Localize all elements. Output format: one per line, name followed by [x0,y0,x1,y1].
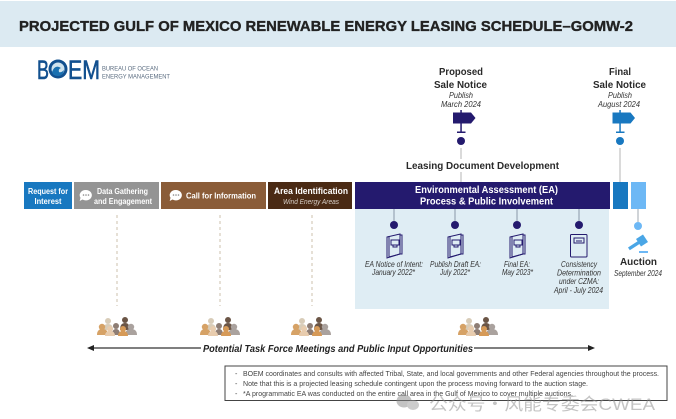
EA header bar: Process & Public Involvement [420,196,554,208]
dashed connectors [117,215,312,306]
EA step: consistency determination: April - July 2024 [553,286,603,295]
EA step: consistency determination: Determination [557,268,601,278]
phase: request for interest: Request for [28,187,68,196]
notes box: *A programmatic EA was conducted on the entire call area in the Gulf of Mexico to cover multiple auctions. [243,389,573,398]
milestone: proposed sale notice: Proposed [439,66,483,78]
milestone: final sale notice [593,66,646,133]
title band [0,1,676,47]
icon: consistency document [570,234,587,257]
notes box: Note that this is a projected leasing schedule contingent upon the process moving forward to the auction stage. [243,379,588,388]
EA step: final EA: May 2023* [502,268,534,277]
BOEM logo: ENERGY MANAGEMENT [102,74,170,80]
phase: call for information [161,182,266,209]
phase: data gathering: Data Gathering [97,187,148,196]
milestone: final sale notice: Final [609,66,631,78]
auction milestone: Auction [620,256,657,268]
phase: auction bar [631,182,646,209]
EA header bar [355,182,610,209]
milestone: final sale notice: Sale Notice [593,79,646,91]
title: PROJECTED GULF OF MEXICO RENEWABLE ENERGY LEASING SCHEDULE–GOMW-2 [19,18,633,35]
panel: environmental assessment [355,182,610,309]
phase: request for interest: Interest [34,197,62,206]
people group 1 [97,317,137,336]
EA header bar: Environmental Assessment (EA) [415,185,558,196]
EA step: consistency determination: under CZMA: [559,277,599,286]
EA step: publish draft: July 2022* [439,268,471,277]
milestone: final sale notice: Publish [608,91,632,100]
phase: area identification: Wind Energy Areas [283,197,339,206]
milestone: proposed sale notice: Sale Notice [434,79,487,91]
people group 2 [200,317,240,336]
icon: proposed signpost [453,110,476,133]
EA step: consistency determination [553,209,603,295]
final milestone dot [616,137,624,145]
phase: area identification: Area Identification [274,186,348,196]
auction milestone [614,222,662,278]
icon: final signpost [612,110,635,133]
EA step: notice of intent: January 2022* [371,268,416,277]
BOEM logo: BUREAU OF OCEAN [102,66,158,72]
milestone: proposed sale notice: Publish [449,91,473,100]
notes box: BOEM coordinates and consults with affected Tribal, State, and local governments and other Federal agencies throughout the process. [243,369,659,378]
notes box: - [235,379,238,388]
phase: request for interest [24,182,72,209]
watermark: 公众号・风能专委会CWEA [429,395,656,414]
BOEM logo [37,55,170,85]
proposed milestone dot [457,137,465,145]
auction milestone: September 2024 [614,269,662,278]
milestone: proposed sale notice: March 2024 [441,100,482,109]
BOEM logo: B [37,55,49,85]
EA step: final EA [502,209,534,277]
task force arrow [87,344,595,355]
icon: gavel [628,234,648,253]
phase: area identification [268,182,352,209]
heading: leasing document development: Leasing Document Development [406,160,559,172]
EA step: final EA: Final EA: [504,260,530,269]
phase: data gathering [74,182,159,209]
milestone: final sale notice: August 2024 [597,100,641,109]
phase: call for information: Call for Information [186,192,256,200]
notes box: - [235,369,238,378]
EA step: notice of intent [365,209,423,277]
EA step: publish draft: Publish Draft EA: [430,260,481,269]
task force label: Potential Task Force Meetings and Public Input Opportunities [203,344,473,355]
people group 3 [291,317,331,336]
EA step: notice of intent: EA Notice of Intent: [365,260,423,269]
milestone: proposed sale notice [434,66,487,133]
phase: final sale notice bar [613,182,628,209]
BOEM logo: EM [68,55,100,85]
notes box: - [235,389,238,398]
EA step: publish draft [430,209,481,277]
phase: data gathering: and Engagement [94,197,152,206]
people group 4 [458,317,498,336]
EA step: consistency determination: Consistency [561,260,598,269]
notes box [225,366,667,400]
